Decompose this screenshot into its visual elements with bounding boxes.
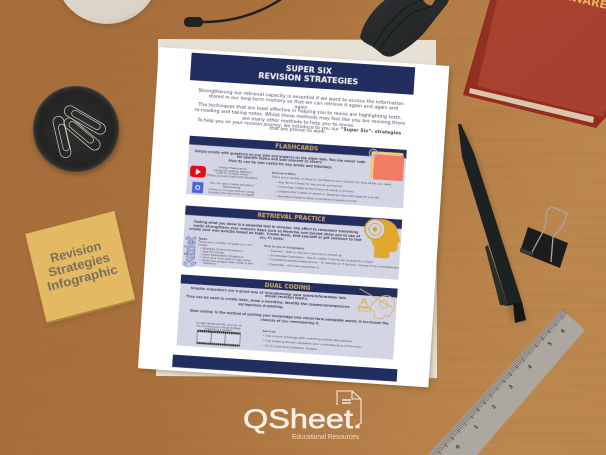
geography tips: • Examples – Give two examples of…	[267, 262, 322, 270]
introduction text: re-reading and taking notes. Whilst these methods may feel like you are revising there	[194, 107, 405, 127]
pen	[458, 124, 528, 323]
title banner: REVISION STRATEGIES	[258, 70, 359, 87]
ruler ticks	[431, 311, 565, 455]
back sheet of paper	[156, 39, 437, 378]
panel: retrieval practice: create your own quizzes based on topic. Create them, test yourself or get someone to test	[189, 226, 362, 242]
QSheet logo	[243, 391, 362, 441]
icon: dual coding head	[358, 289, 396, 320]
tasks list: Tasks	[198, 236, 208, 241]
tasks list	[196, 236, 255, 268]
geography tips: • Causes/Causes/Consequences - To identify or 3 factors, causes of an event/person	[267, 257, 399, 270]
icon: flashcard stack	[368, 149, 405, 181]
ruler numbers	[455, 328, 567, 451]
dual coding tips: • The drawing should represent your understanding of the topic	[262, 338, 362, 349]
icon: film strip	[197, 330, 240, 346]
tasks list: • Gap fill /Cloze	[200, 249, 224, 254]
icon: head with target	[363, 218, 402, 259]
flashcard history tips: • Narrative Create to show a narrative of events in order	[275, 194, 358, 203]
quizlet logo: Quizlet	[183, 236, 200, 268]
panel: retrieval practice: really Strengthens your memory Apps such as Memrise and Quizlet allow you to use of	[193, 223, 360, 238]
activity note: for practicing on a visual strategy	[197, 323, 241, 330]
panel: flashcards: Simply create with questions on one side and answers on the other side. You can colour code	[195, 148, 366, 164]
headset microphone arm	[184, 0, 283, 27]
flashcard history tips: • Key Terms Create for key words and terms	[276, 180, 342, 188]
paper clip dish	[33, 86, 121, 175]
flashcard history tips: • Judgements Create on agree or disagree argument against a quote	[275, 189, 379, 200]
tasks list: • Multiple Choice Questions	[200, 246, 243, 253]
panel: retrieval practice	[182, 205, 402, 281]
panel: dual coding: Dual coding' is the method of putting your knowledge into visual form alongside words. it increases the	[190, 308, 389, 326]
book pages	[469, 88, 594, 123]
geography tips: • Knowledge Organisers - Use to create 'must know' quizzes for a topic	[268, 253, 374, 264]
panel: retrieval practice: you, it's works!	[260, 234, 284, 241]
title banner	[190, 53, 415, 95]
dual coding tips: How to use	[263, 329, 276, 334]
activity note: organising a graphic	[205, 327, 233, 332]
introduction text: The techniques that are least effective in helping you to revise are highlighting texts,	[197, 102, 403, 121]
headset ear cup	[360, 0, 449, 57]
binder clip	[520, 207, 568, 268]
sticky note text	[46, 239, 119, 294]
flashcard tool notes: You can also create excellent	[210, 181, 255, 188]
introduction text: that are proven to work.	[269, 125, 327, 135]
flashcard history tips: How to use in History	[272, 171, 296, 176]
icon: document	[337, 391, 361, 425]
footer banner	[172, 355, 397, 382]
sticky note text: Infographic	[46, 262, 119, 294]
sticky note	[25, 211, 136, 326]
book	[463, 0, 606, 128]
ruler numbers: 3	[508, 384, 515, 391]
tasks list: • Short Explanation Questions	[199, 252, 244, 259]
flashcard history tips	[269, 171, 392, 205]
panel: dual coding	[177, 274, 398, 360]
panel: flashcards: Plus its can be also useful for key words and timelines	[228, 158, 332, 170]
flashcard tool notes: online or on your phone using	[208, 187, 254, 194]
introduction text: again.	[294, 104, 309, 111]
QSheet logo: Educational Resources	[292, 434, 359, 441]
introduction text: stored in our long-term memory so that we can retrieve it again and again and	[208, 93, 398, 112]
ruler numbers: 0	[455, 444, 462, 451]
panel: dual coding: Graphic organisers are a great way of 'transforming' your notes/information into	[190, 285, 347, 300]
sticky note text: Strategies	[47, 250, 111, 280]
panel: retrieval practice: Testing what you know is a powerful tool in revision. the effort to remember something	[194, 219, 359, 234]
flashcard history tips: There are a variety of ways to use flashcards in revision for this within you need	[270, 175, 391, 186]
pen clip	[485, 245, 508, 306]
panel: dual coding: DUAL CODING	[264, 282, 311, 292]
activity note: An appropriate activity, you can do	[196, 321, 242, 328]
panel: dual coding: They can be used to create links, show a narrative, Identify the causes/consequences	[186, 293, 350, 309]
flashcard tool notes: flashcards	[222, 184, 241, 189]
dual coding tips: • Use simple drawings with matching simple descriptions	[262, 333, 353, 343]
icon: video button	[190, 165, 206, 178]
activity note	[196, 321, 242, 333]
geography tips	[263, 244, 400, 275]
tasks list: There are a number of types you can	[197, 239, 252, 247]
panel: flashcards	[186, 136, 407, 208]
introduction text: are many other methods to help you to revise.	[242, 116, 355, 129]
ruler numbers: 1	[473, 424, 480, 431]
flashcard tool notes: Using Flashcards	[219, 165, 247, 171]
introduction text: Strengthening our retrieval capacity is essential if we want to access the information	[198, 88, 404, 107]
icon: quizlet square	[192, 182, 204, 193]
panel: dual coding: chances of you remembering it.	[260, 317, 320, 325]
flashcard tool notes	[206, 164, 259, 197]
ruler	[428, 309, 585, 455]
tasks list: create:	[198, 242, 208, 247]
QSheet logo: QSheet.	[243, 404, 362, 434]
tasks list: • Write the answer then what is the	[199, 258, 253, 265]
panel: dual coding: and importance of something.	[238, 301, 284, 309]
geography tips: • Spaced – Test on old and new topics mixed up	[268, 249, 342, 257]
flashcard tool notes: (Link to Youtube video)	[216, 170, 248, 177]
ruler numbers: 5	[547, 341, 554, 348]
dual coding tips: • Try to draw links between images	[262, 343, 317, 351]
panel: dual coding: visual revision topics.	[265, 293, 309, 301]
dual coding tips	[262, 329, 363, 354]
ruler numbers: 2	[491, 404, 498, 411]
ruler numbers: 4	[527, 364, 534, 371]
introduction text: To help you on your revision journey, we introduce to you our “Super Six”- strategies	[196, 117, 402, 136]
introduction text	[193, 88, 407, 140]
tasks list: question	[203, 261, 216, 266]
flashcard tool notes: https://youtu.be/C20EvKtdJwQ	[207, 173, 258, 180]
panel: flashcards: FLASHCARDS	[275, 143, 318, 152]
flashcard history tips: • Chronology Create for the colours of events or process	[276, 184, 354, 194]
infographic sheet	[138, 47, 451, 389]
paper clips	[52, 104, 108, 159]
panel: flashcards: for specific topics and quiz yourself or others.	[237, 154, 323, 164]
ruler numbers: 6	[560, 328, 567, 335]
title banner: SUPER SIX	[286, 63, 333, 76]
flashcard tool notes: Quizlet (click the icon on right)	[208, 190, 254, 197]
mug	[55, 0, 159, 26]
tasks list: • Odd One Out (ask to say why)	[199, 255, 251, 262]
sticky note text: Revision	[49, 239, 103, 265]
geography tips: How to use in Geography	[264, 244, 304, 250]
panel: retrieval practice: RETRIEVAL PRACTICE	[257, 212, 326, 223]
flashcard tool notes: using the Leitner Method	[213, 168, 252, 174]
